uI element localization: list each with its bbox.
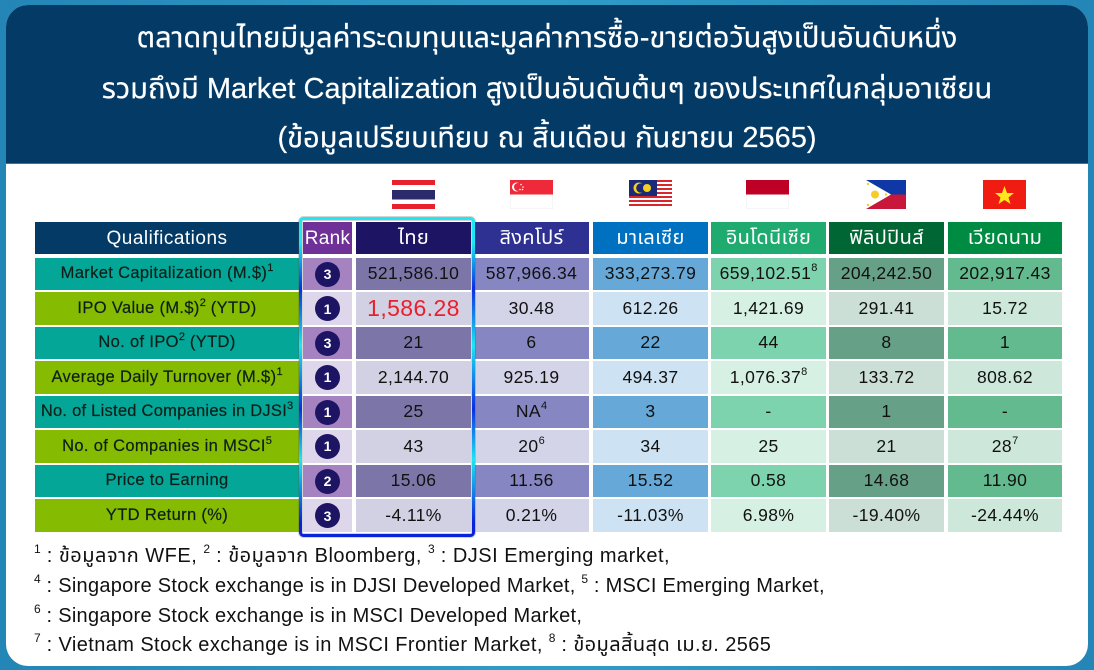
row: Listed Companies in DJSI: - [1002, 401, 1008, 421]
row: Average Daily Turnover: Average Daily Turnover (M.$)1 [51, 366, 283, 386]
row: No. of IPO: 3 [324, 335, 331, 351]
row: IPO Value: IPO Value (M.$)2 (YTD) [77, 296, 257, 317]
row: No. of IPO: 21 [403, 332, 424, 352]
row: Listed Companies in DJSI [35, 396, 1062, 428]
row: Companies in MSCI: 287 [992, 435, 1018, 456]
row: Average Daily Turnover: 133.72 [859, 367, 914, 387]
row: Companies in MSCI: 43 [403, 436, 424, 456]
row: Companies in MSCI: 21 [876, 436, 897, 456]
flag: Indonesia [746, 180, 789, 209]
row: Market Capitalization: 204,242.50 [841, 263, 932, 283]
row: Price to Earning: 2 [324, 473, 331, 489]
row: Market Capitalization: 659,102.518 [720, 262, 817, 283]
row: YTD Return: -4.11% [385, 505, 442, 525]
column headers: สิงคโปร์ [499, 227, 564, 249]
row: YTD Return: YTD Return (%) [106, 506, 228, 524]
row: Listed Companies in DJSI: NA4 [516, 400, 547, 421]
flag: Vietnam [983, 180, 1026, 209]
footnotes [34, 542, 825, 656]
row: Price to Earning: 14.68 [864, 470, 909, 490]
row: Market Capitalization: 202,917.43 [959, 263, 1051, 283]
row: YTD Return: -24.44% [971, 505, 1039, 525]
row: IPO Value: 612.26 [623, 298, 678, 318]
column headers [35, 222, 1062, 254]
row: Price to Earning [35, 465, 1062, 497]
row: YTD Return: -19.40% [852, 505, 920, 525]
column headers: มาเลเซีย [616, 227, 685, 249]
row: Price to Earning: 0.58 [751, 470, 786, 490]
row: IPO Value: 1 [324, 300, 331, 316]
row: IPO Value: 1,586.28 [367, 295, 460, 321]
row: Listed Companies in DJSI: 25 [403, 401, 424, 421]
row: YTD Return: 3 [324, 508, 331, 524]
row: IPO Value: 30.48 [509, 298, 554, 318]
flag: Thailand [392, 180, 435, 209]
row: Price to Earning: 11.90 [983, 470, 1027, 490]
row: Price to Earning: Price to Earning [106, 471, 228, 489]
title line 3: (ข้อมูลเปรียบเทียบ ณ สิ้นเดือน กันยายน 2565) [277, 122, 817, 154]
flag: Malaysia [629, 180, 672, 206]
row: Listed Companies in DJSI: 1 [881, 401, 892, 421]
row: Market Capitalization: 521,586.10 [368, 263, 459, 283]
row: Companies in MSCI [35, 430, 1062, 463]
row: Market Capitalization [35, 258, 1062, 290]
row: Average Daily Turnover: 2,144.70 [378, 367, 449, 387]
footnote line 3: 6 : Singapore Stock exchange is in MSCI Developed Market, [34, 602, 582, 627]
row: Average Daily Turnover: 494.37 [623, 367, 678, 387]
title line 2: รวมถึงมี Market Capitalization สูงเป็นอันดับต้นๆ ของประเทศในกลุ่มอาเซียน [102, 73, 992, 105]
row: No. of IPO: 6 [526, 332, 537, 352]
row: Price to Earning: 11.56 [509, 470, 554, 490]
row: No. of IPO: 22 [640, 332, 661, 352]
flag: Singapore [510, 180, 553, 209]
row: YTD Return [35, 499, 1062, 532]
title banner [6, 5, 1088, 164]
column headers: Qualifications [106, 228, 228, 249]
column headers: Rank [305, 228, 350, 248]
column headers: ฟิลิปปินส์ [849, 227, 924, 249]
row: Average Daily Turnover: 808.62 [977, 367, 1033, 387]
footnote line 2: 4 : Singapore Stock exchange is in DJSI Developed Market, 5 : MSCI Emerging Market, [34, 572, 825, 597]
row: YTD Return: 0.21% [506, 505, 557, 525]
row: No. of IPO: 44 [758, 332, 779, 352]
row: No. of IPO: 8 [881, 332, 892, 352]
row: Companies in MSCI: 1 [324, 438, 331, 454]
row: Price to Earning: 15.52 [628, 470, 673, 490]
footnote line 1: 1 : ข้อมูลจาก WFE, 2 : ข้อมูลจาก Bloomberg, 3 : DJSI Emerging market, [34, 542, 670, 567]
row: Average Daily Turnover: 925.19 [504, 367, 559, 387]
row: Average Daily Turnover: 1,076.378 [730, 366, 807, 387]
row: IPO Value: 15.72 [982, 298, 1028, 318]
row: Price to Earning: 15.06 [391, 470, 436, 490]
row: Listed Companies in DJSI: 3 [645, 401, 656, 421]
highlight box around Thailand column [298, 216, 476, 538]
row: Companies in MSCI: 25 [758, 436, 779, 456]
row: Average Daily Turnover: 1 [324, 369, 331, 385]
column headers: เวียดนาม [968, 227, 1042, 249]
row: Listed Companies in DJSI: No. of Listed Companies in DJSI3 [41, 400, 293, 420]
row: IPO Value [35, 292, 1062, 325]
row: Market Capitalization: Market Capitalization (M.$)1 [61, 262, 273, 282]
row: IPO Value: 1,421.69 [733, 298, 804, 318]
column headers: อินโดนีเซีย [726, 227, 811, 249]
footnote line 4: 7 : Vietnam Stock exchange is in MSCI Frontier Market, 8 : ข้อมูลสิ้นสุด เม.ย. 2565 [34, 631, 771, 656]
row: No. of IPO: 1 [1000, 332, 1010, 352]
row: Listed Companies in DJSI: - [765, 401, 772, 421]
row: No. of IPO [35, 327, 1062, 359]
column headers: ไทย [398, 227, 429, 249]
flag: Philippines [866, 180, 906, 209]
row: Market Capitalization: 333,273.79 [605, 263, 696, 283]
row: Companies in MSCI: 206 [518, 435, 545, 456]
row: Market Capitalization: 587,966.34 [486, 263, 577, 283]
row: IPO Value: 291.41 [859, 298, 914, 318]
row: Market Capitalization: 3 [324, 266, 331, 282]
row: Companies in MSCI: 34 [640, 436, 661, 456]
row: YTD Return: 6.98% [743, 505, 794, 525]
row: YTD Return: -11.03% [617, 505, 684, 525]
row: Listed Companies in DJSI: 1 [324, 404, 331, 420]
row: Average Daily Turnover [35, 361, 1062, 394]
flags row [392, 180, 1026, 209]
title line 1: ตลาดทุนไทยมีมูลค่าระดมทุนและมูลค่าการซื้อ-ขายต่อวันสูงเป็นอันดับหนึ่ง [137, 22, 957, 54]
row: Companies in MSCI: No. of Companies in MSCI5 [62, 434, 272, 455]
row: No. of IPO: No. of IPO2 (YTD) [98, 330, 236, 351]
